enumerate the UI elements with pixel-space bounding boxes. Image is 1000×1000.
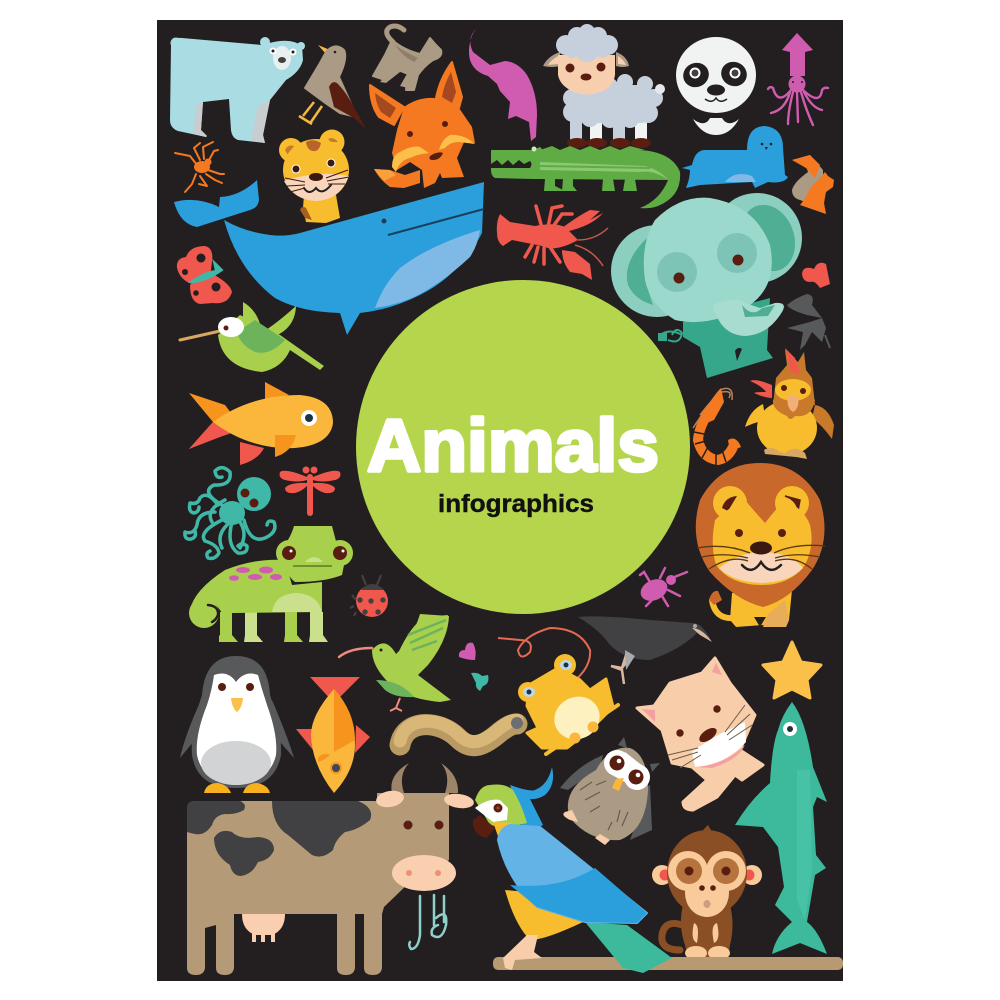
icon: polar bear [170, 37, 305, 143]
icon: teal blob insect [471, 673, 488, 691]
icon: cat [637, 658, 763, 810]
icon: owl [560, 737, 660, 845]
icon: yellow and red fish [296, 677, 370, 793]
icon: blue whale [174, 180, 484, 335]
icon: purple ant [637, 568, 687, 606]
icon: hummingbird [339, 614, 451, 711]
panel: green title circle [356, 280, 690, 614]
icon: panda [676, 37, 756, 135]
icon: teal octopus [185, 468, 275, 558]
icon: pink dinosaur silhouette [469, 28, 537, 141]
icon: frog with tongue [498, 628, 618, 754]
icon: penguin [180, 656, 294, 793]
icon: squirrel [792, 155, 834, 214]
icon: monkey [652, 825, 762, 960]
icon: coral insect shape [802, 263, 830, 288]
icon: branch perch [493, 957, 843, 970]
icon: squid [768, 33, 828, 125]
icon: crocodile [491, 146, 680, 208]
panel: black cover background [157, 20, 843, 981]
icon: small brown dog [373, 26, 441, 90]
icon: green hummingbird with white head [180, 302, 324, 372]
icon: shrimp [693, 388, 741, 466]
icon: dragonfly [280, 466, 340, 516]
icon: star [763, 642, 821, 698]
icon: orange fish [189, 382, 333, 465]
icon: elephant [611, 193, 804, 378]
icon: cow [187, 763, 475, 975]
icon: pink blob insect [459, 643, 476, 660]
icon: chameleon [189, 526, 353, 642]
icon: grey fly [787, 294, 830, 350]
icon: blue seal [682, 126, 788, 188]
title: Animals [367, 404, 659, 487]
icon: ladybird [350, 575, 388, 617]
icon: tiger cub [279, 130, 349, 223]
subtitle: infographics [438, 490, 594, 518]
icon: worm [400, 717, 523, 746]
icon: sheep [543, 24, 665, 148]
icon: seagull [299, 45, 366, 129]
icon: shark [735, 702, 827, 954]
icon: rooster [745, 348, 834, 459]
icon: lion [696, 463, 825, 627]
icon: fox [370, 62, 475, 188]
icon: crow [578, 616, 712, 684]
icon: butterfly [177, 246, 232, 304]
icon: lobster [497, 206, 608, 280]
icon: macaw parrot [473, 767, 672, 973]
icon: spider [175, 142, 224, 192]
